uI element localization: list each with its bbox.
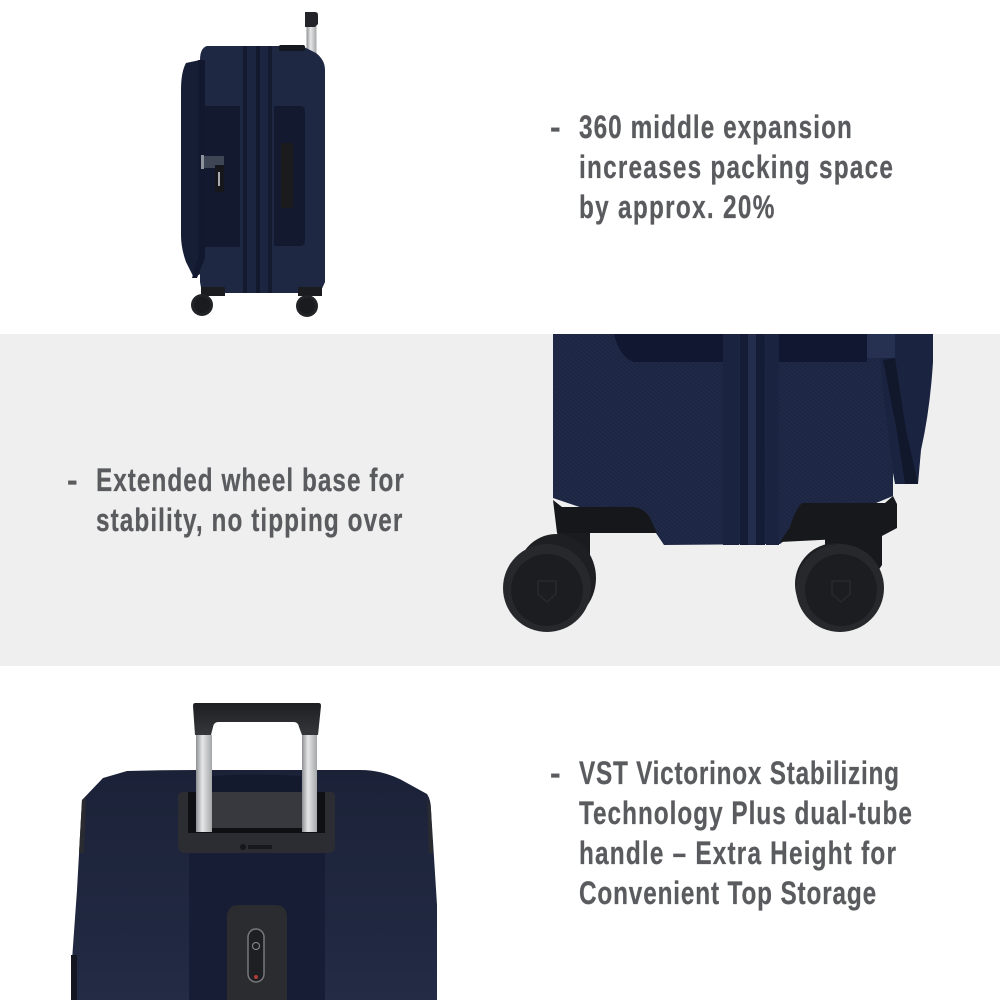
text: 360 middle expansion: by approx. 20% <box>579 190 774 226</box>
dark panel right <box>274 106 305 246</box>
right wheel <box>795 543 884 632</box>
carrying handle top <box>279 45 305 51</box>
housing inner panel <box>212 792 302 828</box>
handle poles <box>196 735 317 833</box>
dark panel left <box>205 106 240 247</box>
text: 360 middle expansion: 360 middle expansion <box>579 110 852 146</box>
housing recess <box>188 792 325 833</box>
panel: rear view suitcase <box>71 703 437 1000</box>
text: 360 middle expansion <box>550 109 893 226</box>
suitcase rear body <box>72 770 437 1000</box>
pocket strap <box>867 334 895 358</box>
text: 360 middle expansion: increases packing space <box>579 150 893 186</box>
handle housing <box>178 792 335 853</box>
lock slider <box>248 929 264 982</box>
telescopic handle <box>305 12 318 56</box>
background band <box>0 334 1000 666</box>
panel: side view suitcase <box>181 12 325 317</box>
combination lock <box>201 155 224 192</box>
text: 360 middle expansion: - <box>550 109 561 145</box>
text: extended wheel base: stability, no tipping over <box>96 503 402 539</box>
telescoping handle grip <box>193 703 321 735</box>
left wheel <box>503 534 596 632</box>
text: VST stabilizing technology: handle – Extra Height for <box>579 836 896 872</box>
text: VST stabilizing technology: - <box>550 755 561 791</box>
upper dark panels <box>614 334 867 362</box>
pocket zipper <box>883 358 918 484</box>
side pocket <box>868 334 933 484</box>
text: extended wheel base <box>67 462 404 539</box>
wheels <box>191 287 322 317</box>
bottom left side shadow <box>71 955 77 1000</box>
top shading <box>212 774 301 793</box>
right wheel mount <box>825 536 882 580</box>
left wheel mount <box>557 533 590 565</box>
text: VST stabilizing technology: Convenient Top Storage <box>579 876 876 912</box>
poles front <box>196 788 317 832</box>
text: VST stabilizing technology: VST Victorinox Stabilizing <box>579 756 899 792</box>
text: VST stabilizing technology: Technology Plus dual-tube <box>579 796 912 832</box>
expansion zipper band <box>243 46 272 293</box>
main body <box>200 45 325 293</box>
right base bumper <box>780 496 897 542</box>
left base bumper <box>553 500 657 533</box>
centre dark panel <box>189 853 325 1000</box>
side handle <box>281 143 293 208</box>
body side shadows <box>79 797 433 853</box>
panel: wheel close-up <box>503 334 933 632</box>
left seam <box>192 60 205 278</box>
rear lock plate <box>227 905 287 1000</box>
centre zipper seams <box>723 334 779 545</box>
text: extended wheel base: Extended wheel base for <box>96 463 404 499</box>
text: VST stabilizing technology <box>550 755 912 912</box>
body fabric <box>553 334 893 545</box>
logo on housing <box>240 844 272 850</box>
front pocket <box>181 60 200 278</box>
text: extended wheel base: - <box>67 462 78 498</box>
